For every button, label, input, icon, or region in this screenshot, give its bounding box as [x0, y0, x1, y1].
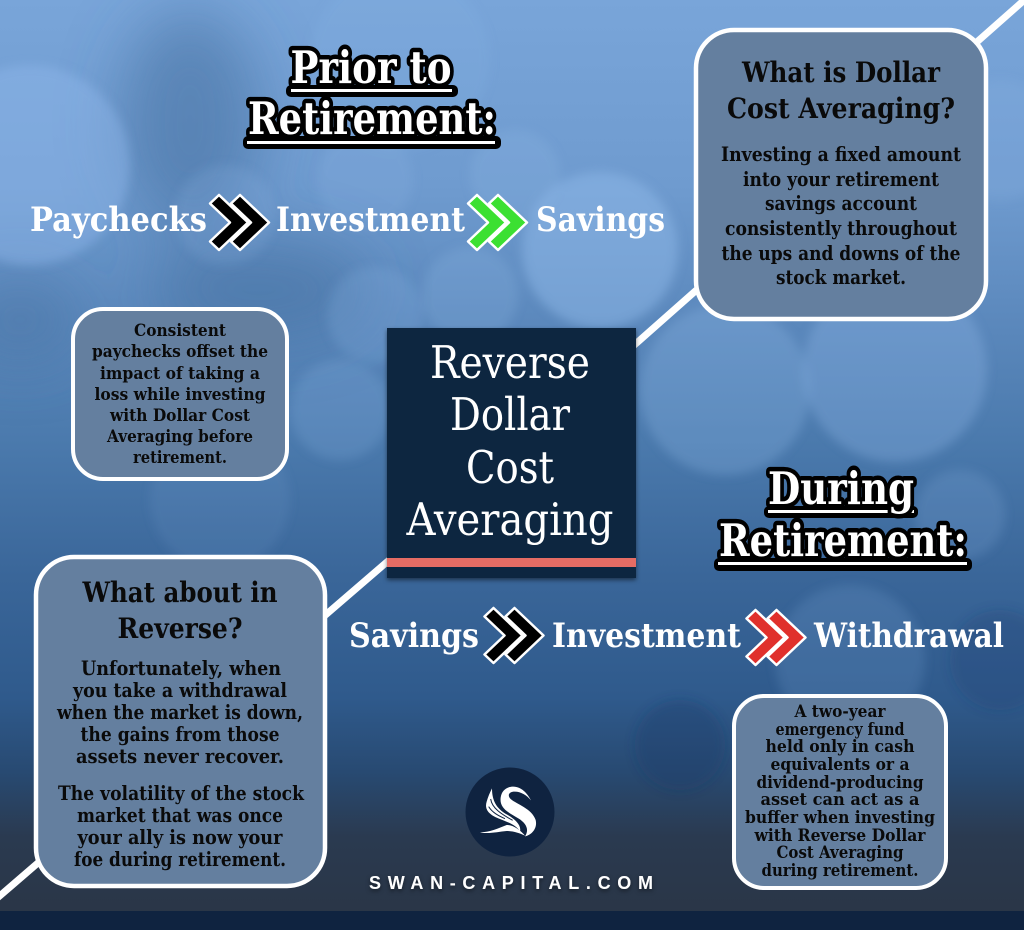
text block: impact of taking a: [100, 364, 260, 384]
text block: retirement.: [133, 448, 227, 468]
text block: emergency fund: [776, 720, 905, 740]
panel: what is dollar cost averaging: [696, 30, 986, 319]
text block: with Reverse Dollar: [754, 826, 926, 846]
body text: Investing a fixed amount: [721, 142, 962, 166]
title: Dollar: [450, 388, 570, 441]
body text: the ups and downs of the: [722, 241, 960, 265]
text block: Averaging before: [106, 427, 253, 447]
title: Reverse: [430, 336, 590, 389]
text block: during retirement.: [762, 861, 918, 881]
body text: you take a withdrawal: [72, 678, 287, 702]
heading: [82, 576, 278, 645]
body text: market that was once: [77, 803, 283, 827]
body text: into your retirement: [743, 167, 940, 191]
panel: emergency fund: [734, 696, 946, 888]
body text: foe during retirement.: [74, 847, 286, 871]
heading: Reverse?: [118, 612, 242, 645]
bottom bar: [0, 911, 1024, 930]
body text: when the market is down,: [56, 700, 303, 724]
text block: loss while investing: [94, 385, 266, 405]
logo: swan: [466, 768, 554, 856]
text block: [745, 702, 935, 881]
heading: What about in: [82, 576, 278, 609]
flow: during retirement: Investment: [552, 616, 741, 656]
text block: Cost Averaging: [776, 843, 904, 863]
body text: The volatility of the stock: [58, 781, 305, 805]
title: Averaging: [406, 493, 614, 546]
heading: prior to retirement: Prior to: [290, 41, 452, 94]
flow: prior to retirement: Paychecks: [30, 200, 207, 240]
flow: prior to retirement: Savings: [536, 200, 665, 240]
flow: during retirement: Savings: [349, 616, 479, 656]
heading: prior to retirement: Retirement:: [248, 92, 496, 145]
body text: your ally is now your: [77, 825, 283, 849]
heading: What is Dollar: [741, 56, 941, 89]
heading: [727, 56, 955, 125]
title: Cost: [466, 441, 554, 494]
body text: stock market.: [776, 265, 906, 289]
panel: center title: [387, 328, 636, 578]
heading: Cost Averaging?: [727, 92, 955, 125]
body text: savings account: [765, 191, 918, 215]
body text: [721, 142, 962, 289]
flow: prior to retirement: [30, 195, 665, 250]
text block: A two-year: [794, 702, 886, 722]
body text: Unfortunately, when: [81, 656, 281, 680]
title: [406, 336, 614, 546]
body text: the gains from those: [80, 722, 280, 746]
flow: during retirement: [349, 608, 1004, 665]
body text: consistently throughout: [725, 216, 958, 240]
panel: consistent paychecks: [73, 309, 287, 479]
body text: [56, 656, 305, 871]
body text: assets never recover.: [76, 744, 284, 768]
heading: during retirement: [714, 462, 972, 571]
website: SWAN-CAPITAL.COM: [369, 873, 653, 893]
text block: buffer when investing: [745, 808, 935, 828]
panel: what about in reverse: [36, 557, 325, 886]
arrow: red chevrons: [746, 610, 806, 665]
heading: during retirement: During: [768, 462, 914, 515]
flow: prior to retirement: Investment: [276, 200, 465, 240]
heading: prior to retirement: [243, 41, 501, 149]
accent bar: [387, 558, 636, 567]
text block: Consistent: [134, 321, 226, 341]
text block: [92, 321, 268, 468]
text block: dividend-producing: [756, 773, 924, 793]
heading: during retirement: Retirement:: [719, 514, 967, 567]
text block: held only in cash: [766, 737, 914, 757]
text block: equivalents or a: [770, 755, 910, 775]
arrow: green chevrons: [468, 195, 527, 250]
text block: paychecks offset the: [92, 342, 268, 362]
arrow: black chevrons: [210, 195, 269, 250]
text block: with Dollar Cost: [109, 406, 250, 426]
arrow: black chevrons: [484, 608, 544, 663]
text block: asset can act as a: [760, 790, 920, 810]
